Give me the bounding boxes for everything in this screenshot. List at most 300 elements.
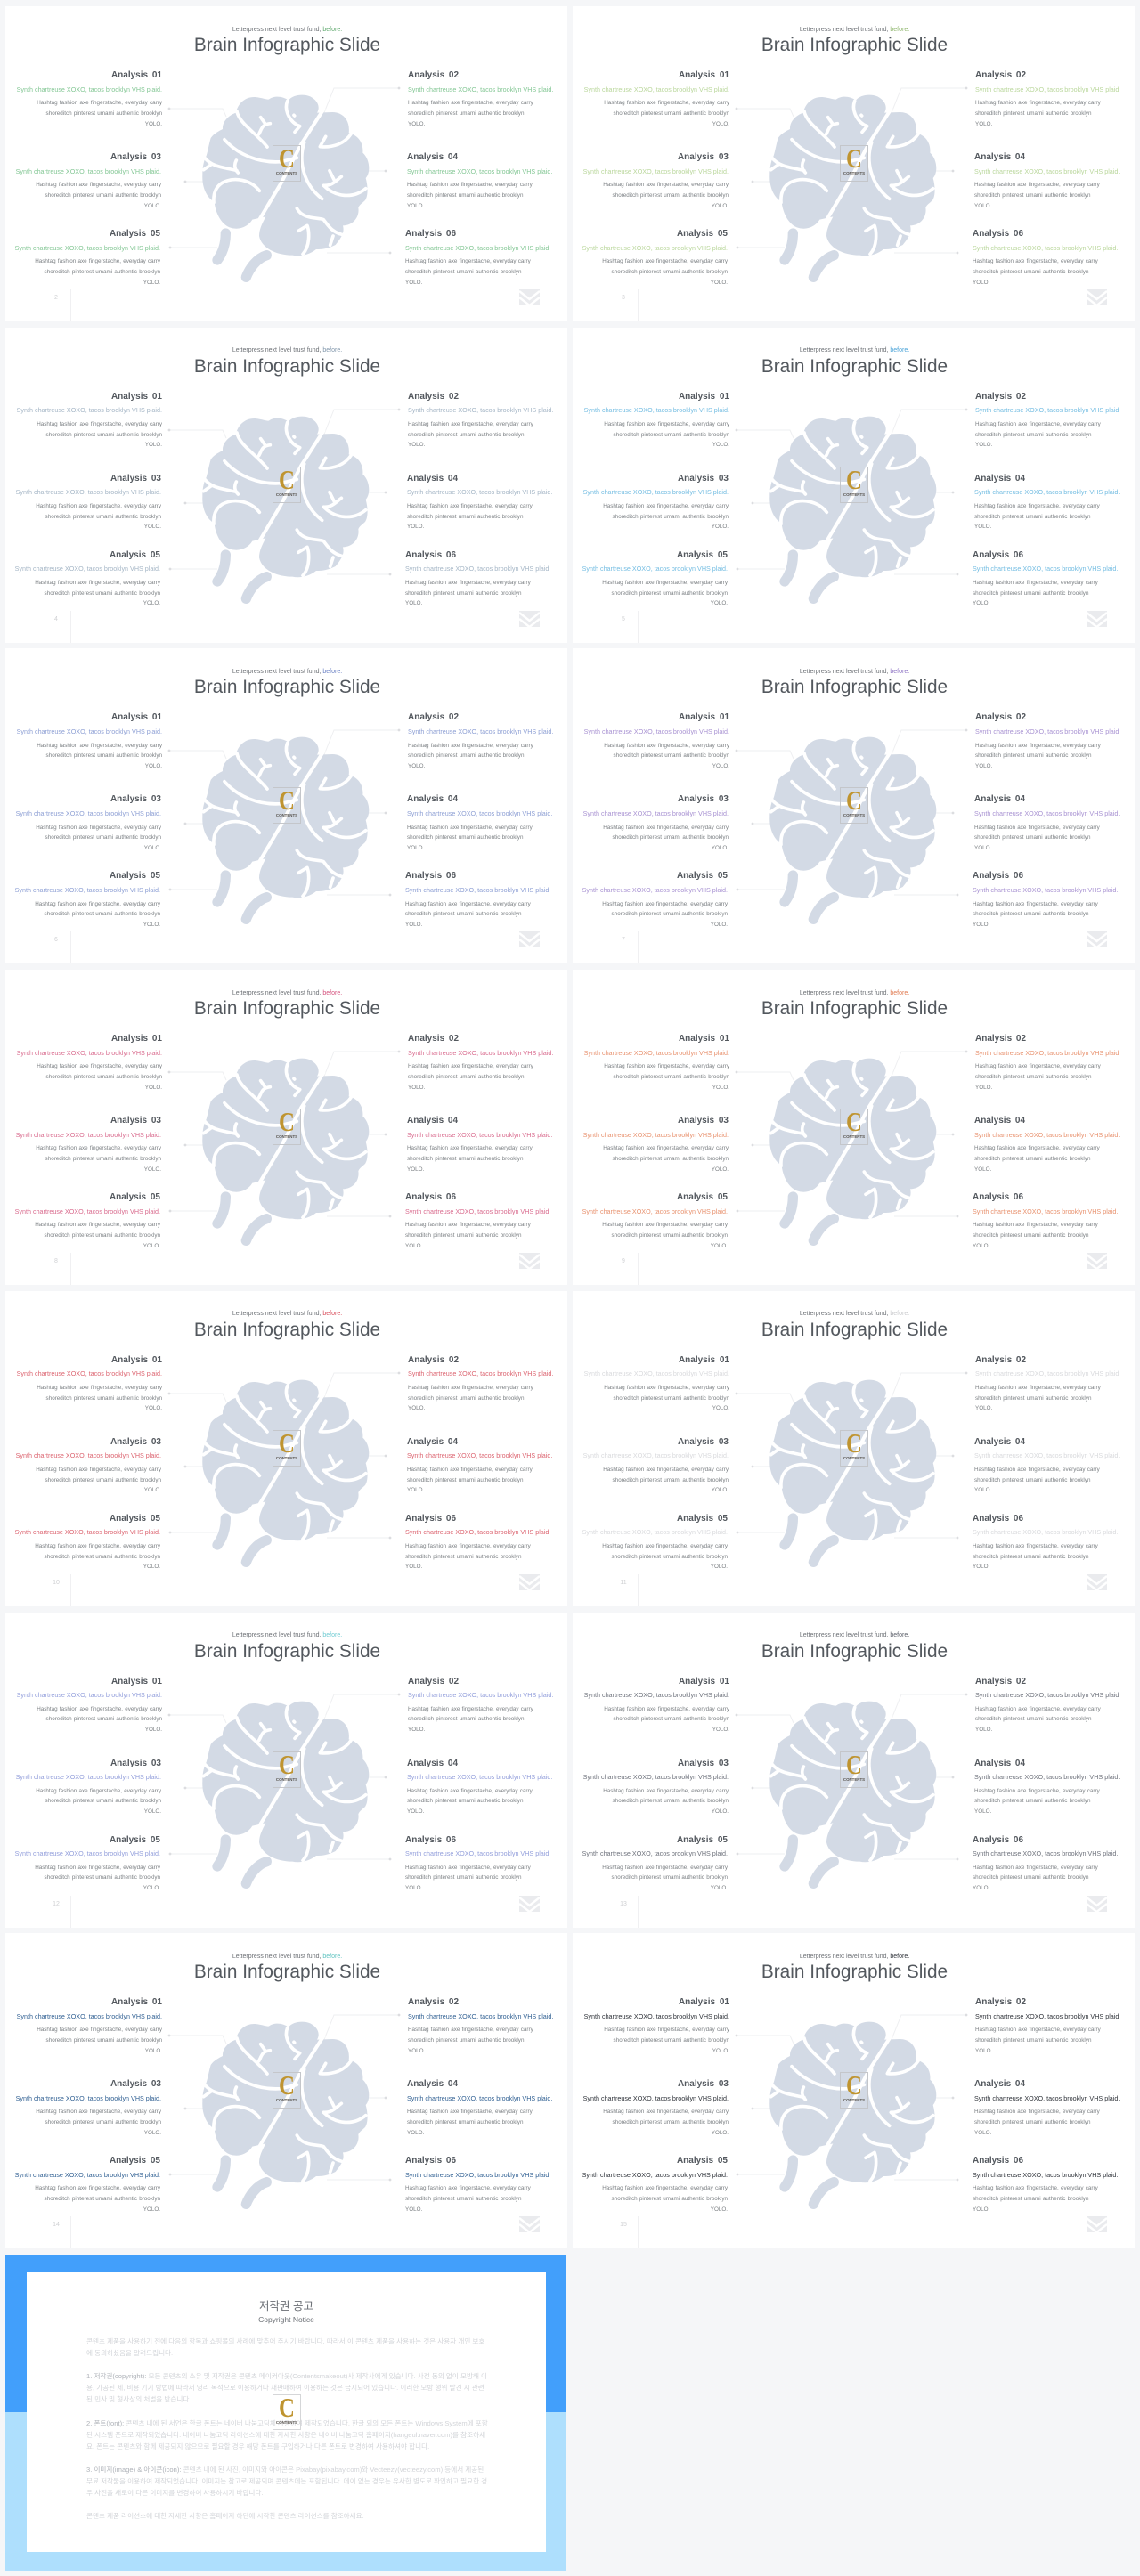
text block: Analysis 03: Analysis 03 bbox=[678, 2079, 729, 2089]
text block: Analysis 04 bbox=[407, 474, 552, 530]
icon: corner mark bbox=[1087, 2216, 1107, 2232]
logo: CONTENTS bbox=[843, 813, 865, 817]
text block: Analysis 03: Hashtag fashion axe fingerstache, everyday carry bbox=[36, 503, 161, 509]
text block: Analysis 02: YOLO. bbox=[975, 1085, 992, 1091]
text block: Analysis 02 bbox=[408, 711, 561, 772]
text block: Analysis 01: shoreditch pinterest umami authentic brooklyn bbox=[614, 1716, 729, 1722]
text block: Analysis 06: Analysis 06 bbox=[405, 550, 456, 560]
text block: Analysis 05 bbox=[574, 1834, 728, 1894]
text block: Analysis 06: shoreditch pinterest umami authentic brooklyn bbox=[973, 1232, 1088, 1239]
panel: slide 14 bbox=[5, 1933, 567, 2248]
text block: Analysis 05: YOLO. bbox=[711, 1243, 728, 1249]
text block: Analysis 04: YOLO. bbox=[407, 524, 424, 530]
text block: Analysis 04: shoreditch pinterest umami authentic brooklyn bbox=[407, 514, 523, 520]
icon: corner mark bbox=[1087, 1895, 1107, 1911]
text block: Analysis 02: YOLO. bbox=[975, 442, 992, 448]
text block: Analysis 03: YOLO. bbox=[144, 1487, 161, 1493]
text block: Analysis 05: shoreditch pinterest umami authentic brooklyn bbox=[612, 1874, 728, 1881]
text block: Analysis 03: Synth chartreuse XOXO, tacos brooklyn VHS plaid. bbox=[16, 488, 161, 496]
text block: Analysis 06: shoreditch pinterest umami authentic brooklyn bbox=[405, 269, 521, 275]
text block: Analysis 06: Analysis 06 bbox=[973, 1514, 1023, 1524]
text block: Analysis 02: YOLO. bbox=[408, 442, 425, 448]
white notice card bbox=[27, 2272, 546, 2552]
text block: Analysis 06: shoreditch pinterest umami authentic brooklyn bbox=[973, 269, 1088, 275]
text block: Analysis 01 bbox=[584, 70, 729, 127]
text block: Analysis 06 bbox=[405, 870, 558, 930]
text block: Analysis 03: YOLO. bbox=[712, 1487, 729, 1493]
text block: Analysis 05 bbox=[7, 870, 160, 930]
text block: Analysis 06: Hashtag fashion axe fingerstache, everyday carry bbox=[973, 580, 1098, 586]
text block: Analysis 05: Synth chartreuse XOXO, tacos brooklyn VHS plaid. bbox=[582, 565, 728, 573]
text block: Analysis 05: shoreditch pinterest umami authentic brooklyn bbox=[45, 1554, 160, 1560]
panel: slide 13 bbox=[573, 1612, 1135, 1927]
page number: 5 bbox=[622, 616, 625, 622]
text block: Analysis 04: YOLO. bbox=[407, 1808, 424, 1815]
text block: Analysis 05: YOLO. bbox=[143, 1564, 160, 1570]
text block: Analysis 05 bbox=[574, 1513, 728, 1572]
text block: Analysis 01: Hashtag fashion axe fingerstache, everyday carry bbox=[604, 421, 729, 427]
text block: Analysis 06: Hashtag fashion axe fingerstache, everyday carry bbox=[973, 258, 1098, 264]
text block: Analysis 03: Hashtag fashion axe fingerstache, everyday carry bbox=[603, 2109, 729, 2115]
text block: Analysis 01: Hashtag fashion axe fingerstache, everyday carry bbox=[604, 1063, 729, 1069]
connector lines bbox=[167, 87, 401, 255]
text block: Analysis 01: Hashtag fashion axe fingerstache, everyday carry bbox=[37, 2027, 162, 2033]
text block: Analysis 02 bbox=[975, 392, 1120, 448]
text block: Analysis 03: shoreditch pinterest umami authentic brooklyn bbox=[613, 514, 729, 520]
text block: Analysis 04: Hashtag fashion axe fingerstache, everyday carry bbox=[407, 1145, 533, 1151]
icon: corner mark bbox=[519, 1574, 540, 1590]
text block: Analysis 02: Synth chartreuse XOXO, tacos brooklyn VHS plaid. bbox=[975, 406, 1120, 414]
connector lines bbox=[5, 648, 567, 963]
icon: corner mark bbox=[1087, 931, 1107, 947]
text block: Analysis 04: shoreditch pinterest umami authentic brooklyn bbox=[407, 1798, 523, 1804]
text block: Analysis 01: Analysis 01 bbox=[111, 1034, 162, 1044]
text block: Analysis 06: YOLO. bbox=[405, 1243, 422, 1249]
text block: Analysis 05: Hashtag fashion axe fingerstache, everyday carry bbox=[35, 258, 160, 264]
icon: corner mark bbox=[1087, 1574, 1107, 1590]
text block: Analysis 06: YOLO. bbox=[405, 1885, 422, 1891]
text block: Analysis 04: Hashtag fashion axe fingerstache, everyday carry bbox=[974, 1145, 1100, 1151]
text block: Analysis 04: shoreditch pinterest umami authentic brooklyn bbox=[407, 1156, 523, 1162]
text block: Analysis 04: Analysis 04 bbox=[407, 1116, 458, 1125]
subtitle: Letterpress next level trust fund, before. bbox=[800, 1954, 909, 1960]
title: Brain Infographic Slide bbox=[761, 1640, 948, 1662]
logo bbox=[840, 2072, 868, 2109]
brain illustration bbox=[178, 722, 392, 936]
text block: Analysis 06: Synth chartreuse XOXO, tacos brooklyn VHS plaid. bbox=[405, 565, 550, 573]
text block: Analysis 01: shoreditch pinterest umami authentic brooklyn bbox=[46, 1074, 162, 1080]
text block: Analysis 05: Hashtag fashion axe fingerstache, everyday carry bbox=[35, 1865, 160, 1871]
text block: Analysis 03: shoreditch pinterest umami authentic brooklyn bbox=[45, 834, 161, 841]
text block: Analysis 05: Hashtag fashion axe fingerstache, everyday carry bbox=[35, 1222, 160, 1228]
text block: Analysis 02 bbox=[408, 392, 553, 448]
logo bbox=[273, 467, 301, 503]
text block: Analysis 01: Hashtag fashion axe fingerstache, everyday carry bbox=[604, 100, 729, 106]
text block: Analysis 03: Hashtag fashion axe fingerstache, everyday carry bbox=[36, 1467, 161, 1473]
text block: Analysis 01: Hashtag fashion axe fingerstache, everyday carry bbox=[604, 1706, 729, 1712]
text block: Analysis 01: Hashtag fashion axe fingerstache, everyday carry bbox=[37, 743, 162, 749]
brain illustration bbox=[178, 1686, 392, 1900]
page number: 6 bbox=[54, 937, 58, 943]
text block: Analysis 03: Synth chartreuse XOXO, tacos brooklyn VHS plaid. bbox=[583, 1451, 729, 1459]
text block: Analysis 02: YOLO. bbox=[975, 2048, 992, 2054]
panel: slide 10 bbox=[5, 1291, 567, 1606]
logo: CONTENTS bbox=[276, 1456, 297, 1460]
panel: slide 8 bbox=[5, 970, 567, 1285]
text block: Analysis 02: YOLO. bbox=[408, 2048, 425, 2054]
brain illustration bbox=[745, 1365, 959, 1579]
text block: Analysis 04: Hashtag fashion axe fingerstache, everyday carry bbox=[407, 1467, 533, 1473]
text block: Analysis 06: shoreditch pinterest umami authentic brooklyn bbox=[973, 1554, 1088, 1560]
text block: Analysis 06 bbox=[973, 550, 1118, 606]
text block: Analysis 04: Hashtag fashion axe fingerstache, everyday carry bbox=[407, 503, 533, 509]
brain illustration bbox=[770, 417, 937, 604]
text block: Analysis 03: Synth chartreuse XOXO, tacos brooklyn VHS plaid. bbox=[583, 1773, 729, 1781]
text block: Analysis 03 bbox=[8, 1758, 161, 1817]
text block: Analysis 06: Synth chartreuse XOXO, tacos brooklyn VHS plaid. bbox=[405, 1528, 550, 1536]
logo bbox=[273, 1430, 301, 1467]
text block: Analysis 03: Hashtag fashion axe fingerstache, everyday carry bbox=[36, 2109, 161, 2115]
text block: Analysis 01: Analysis 01 bbox=[679, 1676, 729, 1686]
text block: Analysis 04 bbox=[974, 152, 1120, 209]
text block: Analysis 03: shoreditch pinterest umami authentic brooklyn bbox=[45, 1477, 161, 1483]
text block: Analysis 05: Hashtag fashion axe fingerstache, everyday carry bbox=[35, 580, 160, 586]
notice paragraph: copyright: 1. 저작권(copyright): 모든 콘텐츠의 소유 및 저작권은 콘텐츠 메이커아웃(Contentsmakeout)사 제작사에게 있습니다. 사전 동의 없이 모방해 이용, 가공된 제, 비용 기기 방법에 따라서 영리 목적으로 이용하거나 재판매하여 이용하는 것은 금지되어 있습니다. 이러한 모방 행위 발견 시 관련된 민사 및 형사상의 처벌을 받습니다. bbox=[86, 2372, 487, 2403]
text block: Analysis 04 bbox=[974, 2078, 1128, 2138]
notice subheading: Copyright Notice bbox=[258, 2315, 314, 2324]
text block: Analysis 03: YOLO. bbox=[144, 1808, 161, 1815]
icon: corner mark bbox=[1087, 1253, 1107, 1269]
subtitle: Letterpress next level trust fund, before. bbox=[232, 1954, 342, 1960]
text block: Analysis 05 bbox=[7, 1191, 160, 1251]
text block: Analysis 03: shoreditch pinterest umami authentic brooklyn bbox=[613, 192, 729, 199]
text block: Analysis 05: shoreditch pinterest umami authentic brooklyn bbox=[612, 269, 728, 275]
text block: Analysis 03 bbox=[8, 793, 161, 854]
text block: Analysis 05 bbox=[582, 550, 728, 606]
text block: Analysis 05: shoreditch pinterest umami authentic brooklyn bbox=[45, 2196, 160, 2202]
text block: Analysis 01: Analysis 01 bbox=[679, 712, 729, 722]
text block: Analysis 05: shoreditch pinterest umami authentic brooklyn bbox=[45, 590, 160, 597]
text block: Analysis 04: YOLO. bbox=[974, 524, 991, 530]
page number: 7 bbox=[622, 937, 625, 943]
text block: Analysis 06 bbox=[405, 2155, 558, 2214]
text block: Analysis 04: shoreditch pinterest umami authentic brooklyn bbox=[974, 1477, 1090, 1483]
text block: Analysis 06 bbox=[973, 870, 1126, 930]
text block: Analysis 01 bbox=[576, 1354, 729, 1414]
text block: Analysis 02 bbox=[408, 70, 553, 127]
text block: Analysis 02: shoreditch pinterest umami authentic brooklyn bbox=[975, 110, 1091, 117]
text block: Analysis 05: shoreditch pinterest umami authentic brooklyn bbox=[45, 1874, 160, 1881]
text block: Analysis 03 bbox=[575, 2078, 729, 2138]
panel: slide 9 bbox=[573, 970, 1135, 1285]
text block: Analysis 02: Synth chartreuse XOXO, tacos brooklyn VHS plaid. bbox=[975, 1049, 1120, 1057]
text block: Analysis 05: Synth chartreuse XOXO, tacos brooklyn VHS plaid. bbox=[582, 1528, 728, 1536]
title: Brain Infographic Slide bbox=[194, 35, 380, 55]
panel: slide 3 bbox=[573, 6, 1135, 321]
text block: Analysis 02: Synth chartreuse XOXO, tacos brooklyn VHS plaid. bbox=[975, 2012, 1120, 2020]
text block: Analysis 02: shoreditch pinterest umami authentic brooklyn bbox=[975, 1716, 1091, 1722]
text block: Analysis 05 bbox=[15, 229, 160, 286]
text block: Analysis 01: shoreditch pinterest umami authentic brooklyn bbox=[614, 432, 729, 438]
text block: Analysis 06: shoreditch pinterest umami authentic brooklyn bbox=[405, 1874, 521, 1881]
icon: corner mark bbox=[519, 1253, 540, 1269]
text block: Analysis 05: YOLO. bbox=[143, 280, 160, 286]
panel: slide 12 bbox=[5, 1612, 567, 1927]
text block: Analysis 02: Synth chartreuse XOXO, tacos brooklyn VHS plaid. bbox=[408, 727, 553, 735]
text block: Analysis 02: YOLO. bbox=[975, 1727, 992, 1733]
text block: Analysis 03: Hashtag fashion axe fingerstache, everyday carry bbox=[603, 1145, 729, 1151]
panel: slide 15 bbox=[573, 1933, 1135, 2248]
subtitle: Letterpress next level trust fund, before. bbox=[232, 347, 342, 353]
brain illustration bbox=[178, 1044, 392, 1257]
connector lines bbox=[736, 408, 967, 575]
text block: Analysis 02: Hashtag fashion axe fingerstache, everyday carry bbox=[975, 1385, 1101, 1391]
text block: Analysis 06: Synth chartreuse XOXO, tacos brooklyn VHS plaid. bbox=[973, 1849, 1118, 1857]
text block: Analysis 01: Synth chartreuse XOXO, tacos brooklyn VHS plaid. bbox=[17, 1691, 162, 1699]
text block: Analysis 04: Synth chartreuse XOXO, tacos brooklyn VHS plaid. bbox=[407, 488, 552, 496]
text block: Analysis 02: YOLO. bbox=[408, 121, 425, 127]
title: Brain Infographic Slide bbox=[761, 998, 948, 1019]
text block: Analysis 04: Synth chartreuse XOXO, tacos brooklyn VHS plaid. bbox=[407, 167, 552, 175]
text block: Analysis 06: shoreditch pinterest umami authentic brooklyn bbox=[973, 1874, 1088, 1881]
text block: Analysis 06: shoreditch pinterest umami authentic brooklyn bbox=[405, 1232, 521, 1239]
text block: Analysis 02: Hashtag fashion axe fingerstache, everyday carry bbox=[975, 1706, 1101, 1712]
text block: Analysis 03: shoreditch pinterest umami authentic brooklyn bbox=[45, 192, 161, 199]
page number: 10 bbox=[53, 1580, 60, 1586]
text block: Analysis 05: Analysis 05 bbox=[110, 550, 160, 560]
text block: Analysis 01: YOLO. bbox=[145, 1085, 162, 1091]
title: Brain Infographic Slide bbox=[194, 1640, 380, 1662]
text block: Analysis 01: Analysis 01 bbox=[111, 392, 162, 402]
text block: Analysis 04: Hashtag fashion axe fingerstache, everyday carry bbox=[974, 825, 1100, 831]
text block: Analysis 01: Analysis 01 bbox=[679, 392, 729, 402]
text block: Analysis 01: Hashtag fashion axe fingerstache, everyday carry bbox=[604, 2027, 729, 2033]
text block: Analysis 01: Hashtag fashion axe fingerstache, everyday carry bbox=[604, 743, 729, 749]
text block: Analysis 01: shoreditch pinterest umami authentic brooklyn bbox=[614, 110, 729, 117]
text block: Analysis 04: shoreditch pinterest umami authentic brooklyn bbox=[407, 2119, 523, 2125]
text block: Analysis 06: Synth chartreuse XOXO, tacos brooklyn VHS plaid. bbox=[973, 565, 1118, 573]
text block: Analysis 02: shoreditch pinterest umami authentic brooklyn bbox=[975, 432, 1091, 438]
text block: Analysis 02: Analysis 02 bbox=[975, 1034, 1026, 1044]
notice paragraph: font: 2. 폰트(font): 콘텐츠 내에 된 서언은 한글 폰트는 네이버 나눔고딕체 사용하여 제작되었습니다. 한글 외의 모든 폰트는 Windows System에 포함된 시스템 폰트로 제작되었습니다. 네이버 나눔고딕 라이선스에 대한 자세한 사항은 네이버 나눔고딕 홈페이지(hangeul.naver.com)를 참조하세요. 폰트는 콘텐츠와 함께 제공되지 않으므로 필요할 경우 해당 폰트를 구입하거나 다른 폰트로 변경하여 사용하셔야 합니다. bbox=[86, 2418, 488, 2450]
title: Brain Infographic Slide bbox=[194, 677, 380, 697]
connector lines bbox=[573, 970, 1135, 1285]
text block: Analysis 02: YOLO. bbox=[975, 1405, 992, 1411]
text block: Analysis 02: Synth chartreuse XOXO, tacos brooklyn VHS plaid. bbox=[408, 85, 553, 93]
text block: Analysis 03: Hashtag fashion axe fingerstache, everyday carry bbox=[36, 182, 161, 188]
text block: Analysis 01: Analysis 01 bbox=[111, 1355, 162, 1365]
connector lines bbox=[5, 1291, 567, 1606]
text block: Analysis 03: YOLO. bbox=[144, 203, 161, 209]
text block: Analysis 05: Synth chartreuse XOXO, tacos brooklyn VHS plaid. bbox=[582, 1849, 728, 1857]
text block: Analysis 02: Analysis 02 bbox=[975, 392, 1026, 402]
text block: Analysis 06 bbox=[405, 1513, 558, 1572]
text block: Analysis 06: Synth chartreuse XOXO, tacos brooklyn VHS plaid. bbox=[405, 886, 550, 894]
text block: Analysis 02: Hashtag fashion axe fingerstache, everyday carry bbox=[975, 2027, 1101, 2033]
text block: Analysis 02: Hashtag fashion axe fingerstache, everyday carry bbox=[408, 743, 533, 749]
notice heading: 저작권 공고 bbox=[259, 2300, 314, 2312]
text block: Analysis 06 bbox=[405, 550, 550, 606]
panel: copyright notice bbox=[5, 2255, 566, 2571]
text block: Analysis 03: shoreditch pinterest umami authentic brooklyn bbox=[613, 834, 729, 841]
brain illustration bbox=[178, 1365, 392, 1579]
text block: Analysis 06 bbox=[405, 1191, 558, 1251]
text block: Analysis 02: YOLO. bbox=[975, 763, 992, 769]
logo bbox=[840, 1751, 868, 1788]
text block: Analysis 04: Analysis 04 bbox=[974, 2079, 1025, 2089]
text block: Analysis 06: Analysis 06 bbox=[973, 871, 1023, 881]
text block: Analysis 06: Analysis 06 bbox=[405, 1192, 456, 1202]
connector lines bbox=[573, 648, 1135, 963]
icon: corner mark bbox=[519, 289, 540, 305]
text block: Analysis 02: Hashtag fashion axe fingerstache, everyday carry bbox=[975, 743, 1101, 749]
text block: Analysis 06: YOLO. bbox=[973, 280, 989, 286]
text block: Analysis 05: shoreditch pinterest umami authentic brooklyn bbox=[45, 1232, 160, 1239]
text block: Analysis 04: Hashtag fashion axe fingerstache, everyday carry bbox=[974, 503, 1100, 509]
text block: Analysis 04: Hashtag fashion axe fingerstache, everyday carry bbox=[974, 1788, 1100, 1794]
text block: Analysis 03: Hashtag fashion axe fingerstache, everyday carry bbox=[603, 1467, 729, 1473]
text block: Analysis 02: shoreditch pinterest umami authentic brooklyn bbox=[975, 1074, 1091, 1080]
text block: Analysis 02: Synth chartreuse XOXO, tacos brooklyn VHS plaid. bbox=[408, 2012, 553, 2020]
text block: Analysis 04 bbox=[974, 1115, 1128, 1174]
text block: Analysis 03: shoreditch pinterest umami authentic brooklyn bbox=[613, 1798, 729, 1804]
text block: Analysis 03: YOLO. bbox=[712, 2130, 729, 2136]
text block: Analysis 04: YOLO. bbox=[974, 845, 991, 851]
subtitle: Letterpress next level trust fund, before. bbox=[800, 1632, 909, 1638]
text block: Analysis 01: shoreditch pinterest umami authentic brooklyn bbox=[614, 1395, 729, 1402]
text block: Analysis 05: Synth chartreuse XOXO, tacos brooklyn VHS plaid. bbox=[15, 565, 160, 573]
text block: Analysis 06: Hashtag fashion axe fingerstache, everyday carry bbox=[973, 1222, 1098, 1228]
text block: Analysis 01: Analysis 01 bbox=[111, 712, 162, 722]
subtitle: Letterpress next level trust fund, before. bbox=[232, 1632, 342, 1638]
text block: Analysis 04: YOLO. bbox=[407, 2130, 424, 2136]
text block: Analysis 02: Analysis 02 bbox=[975, 712, 1026, 722]
logo: CONTENTS bbox=[276, 2420, 297, 2425]
text block: Analysis 02: shoreditch pinterest umami authentic brooklyn bbox=[975, 1395, 1091, 1402]
text block: Analysis 05: Analysis 05 bbox=[110, 229, 160, 239]
text block: Analysis 02: Analysis 02 bbox=[408, 70, 459, 80]
text block: Analysis 06 bbox=[973, 1834, 1126, 1894]
text block: Analysis 05: shoreditch pinterest umami authentic brooklyn bbox=[612, 1554, 728, 1560]
text block: Analysis 06 bbox=[973, 229, 1118, 286]
title: Brain Infographic Slide bbox=[761, 1962, 948, 1982]
brain illustration bbox=[770, 94, 937, 282]
brain illustration bbox=[745, 1686, 959, 1900]
text block: Analysis 04: Analysis 04 bbox=[974, 1116, 1025, 1125]
text block: Analysis 05: Hashtag fashion axe fingerstache, everyday carry bbox=[602, 258, 728, 264]
text block: Analysis 05: Hashtag fashion axe fingerstache, everyday carry bbox=[602, 1543, 728, 1549]
text block: Analysis 06: YOLO. bbox=[405, 2206, 422, 2213]
text block: Analysis 06: Analysis 06 bbox=[405, 871, 456, 881]
text block: Analysis 05: Analysis 05 bbox=[110, 1834, 160, 1845]
text block: Analysis 02: Synth chartreuse XOXO, tacos brooklyn VHS plaid. bbox=[975, 1691, 1120, 1699]
text block: Analysis 06: Synth chartreuse XOXO, tacos brooklyn VHS plaid. bbox=[405, 2171, 550, 2179]
text block: Analysis 01: Synth chartreuse XOXO, tacos brooklyn VHS plaid. bbox=[17, 1049, 162, 1057]
text block: Analysis 02: Hashtag fashion axe fingerstache, everyday carry bbox=[408, 100, 533, 106]
text block: Analysis 01: YOLO. bbox=[145, 2048, 162, 2054]
text block: Analysis 03 bbox=[8, 2078, 161, 2138]
text block: Analysis 03 bbox=[583, 474, 729, 530]
text block: Analysis 01: shoreditch pinterest umami authentic brooklyn bbox=[46, 1395, 162, 1402]
text block: Analysis 02 bbox=[975, 1354, 1128, 1414]
brain illustration bbox=[178, 2007, 392, 2221]
text block: Analysis 03 bbox=[8, 1436, 161, 1496]
text block: Analysis 03: Hashtag fashion axe fingerstache, everyday carry bbox=[36, 1788, 161, 1794]
text block: Analysis 05: YOLO. bbox=[711, 922, 728, 928]
logo bbox=[840, 787, 868, 824]
text block: Analysis 06: YOLO. bbox=[405, 1564, 422, 1570]
title: Brain Infographic Slide bbox=[761, 1320, 948, 1340]
text block: Analysis 01: Hashtag fashion axe fingerstache, everyday carry bbox=[604, 1385, 729, 1391]
text block: Analysis 04: Synth chartreuse XOXO, tacos brooklyn VHS plaid. bbox=[407, 1131, 552, 1139]
text block: Analysis 04: Analysis 04 bbox=[974, 474, 1025, 484]
text block: Analysis 03: Synth chartreuse XOXO, tacos brooklyn VHS plaid. bbox=[583, 809, 729, 817]
panel: slide 5 bbox=[573, 328, 1135, 643]
text block: Analysis 02: Hashtag fashion axe fingerstache, everyday carry bbox=[975, 100, 1101, 106]
text block: Analysis 03: shoreditch pinterest umami authentic brooklyn bbox=[613, 1477, 729, 1483]
text block: Analysis 05: Synth chartreuse XOXO, tacos brooklyn VHS plaid. bbox=[582, 886, 728, 894]
text block: Analysis 03: Hashtag fashion axe fingerstache, everyday carry bbox=[36, 1145, 161, 1151]
subtitle: Letterpress next level trust fund, before. bbox=[232, 669, 342, 675]
text block: Analysis 01: Synth chartreuse XOXO, tacos brooklyn VHS plaid. bbox=[584, 1049, 729, 1057]
title: Brain Infographic Slide bbox=[761, 677, 948, 697]
title: Brain Infographic Slide bbox=[194, 356, 380, 377]
text block: Analysis 04: Synth chartreuse XOXO, tacos brooklyn VHS plaid. bbox=[974, 809, 1120, 817]
text block: Analysis 05: Hashtag fashion axe fingerstache, everyday carry bbox=[602, 901, 728, 907]
text block: Analysis 01: YOLO. bbox=[145, 121, 162, 127]
text block: Analysis 03: shoreditch pinterest umami authentic brooklyn bbox=[613, 2119, 729, 2125]
text block: Analysis 05: Analysis 05 bbox=[110, 871, 160, 881]
logo bbox=[273, 145, 301, 182]
text block: Analysis 02: Analysis 02 bbox=[975, 1676, 1026, 1686]
text block: Analysis 03: YOLO. bbox=[712, 845, 729, 851]
text block: Analysis 06: shoreditch pinterest umami authentic brooklyn bbox=[973, 590, 1088, 597]
subtitle: Letterpress next level trust fund, before. bbox=[800, 27, 909, 32]
text block: Analysis 06: Hashtag fashion axe fingerstache, everyday carry bbox=[405, 2185, 531, 2191]
text block: Analysis 04: Synth chartreuse XOXO, tacos brooklyn VHS plaid. bbox=[407, 1773, 552, 1781]
text block: Analysis 01 bbox=[9, 1033, 162, 1093]
icon: corner mark bbox=[1087, 289, 1107, 305]
text block: Analysis 05: Analysis 05 bbox=[110, 1514, 160, 1524]
text block: Analysis 04: Synth chartreuse XOXO, tacos brooklyn VHS plaid. bbox=[407, 1451, 552, 1459]
text block: Analysis 03: Synth chartreuse XOXO, tacos brooklyn VHS plaid. bbox=[16, 1773, 161, 1781]
subtitle: Letterpress next level trust fund, before. bbox=[232, 1311, 342, 1317]
text block: Analysis 03: Synth chartreuse XOXO, tacos brooklyn VHS plaid. bbox=[583, 488, 729, 496]
text block: Analysis 04: shoreditch pinterest umami authentic brooklyn bbox=[974, 1156, 1090, 1162]
text block: Analysis 04: shoreditch pinterest umami authentic brooklyn bbox=[974, 834, 1090, 841]
text block: Analysis 05: Hashtag fashion axe fingerstache, everyday carry bbox=[602, 1865, 728, 1871]
title: Brain Infographic Slide bbox=[761, 35, 948, 55]
text block: Analysis 02: Analysis 02 bbox=[408, 392, 459, 402]
text block: Analysis 01 bbox=[9, 1996, 162, 2056]
text block: Analysis 03: Synth chartreuse XOXO, tacos brooklyn VHS plaid. bbox=[16, 1131, 161, 1139]
text block: Analysis 06: Analysis 06 bbox=[973, 1834, 1023, 1845]
text block: Analysis 05: Synth chartreuse XOXO, tacos brooklyn VHS plaid. bbox=[582, 1207, 728, 1215]
text block: Analysis 02 bbox=[408, 1676, 561, 1735]
text block: Analysis 01 bbox=[17, 392, 162, 448]
logo: CONTENTS bbox=[843, 171, 865, 175]
text block: Analysis 05 bbox=[7, 1513, 160, 1572]
text block: Analysis 05: shoreditch pinterest umami authentic brooklyn bbox=[612, 590, 728, 597]
text block: Analysis 01 bbox=[576, 1676, 729, 1735]
text block: Analysis 06: Hashtag fashion axe fingerstache, everyday carry bbox=[405, 1865, 531, 1871]
text block: Analysis 04 bbox=[407, 1115, 560, 1174]
icon: corner mark bbox=[519, 931, 540, 947]
panel: slide 7 bbox=[573, 648, 1135, 963]
text block: Analysis 05: YOLO. bbox=[711, 600, 728, 606]
text block: Analysis 01: shoreditch pinterest umami authentic brooklyn bbox=[46, 110, 162, 117]
text block: Analysis 03: Hashtag fashion axe fingerstache, everyday carry bbox=[36, 825, 161, 831]
